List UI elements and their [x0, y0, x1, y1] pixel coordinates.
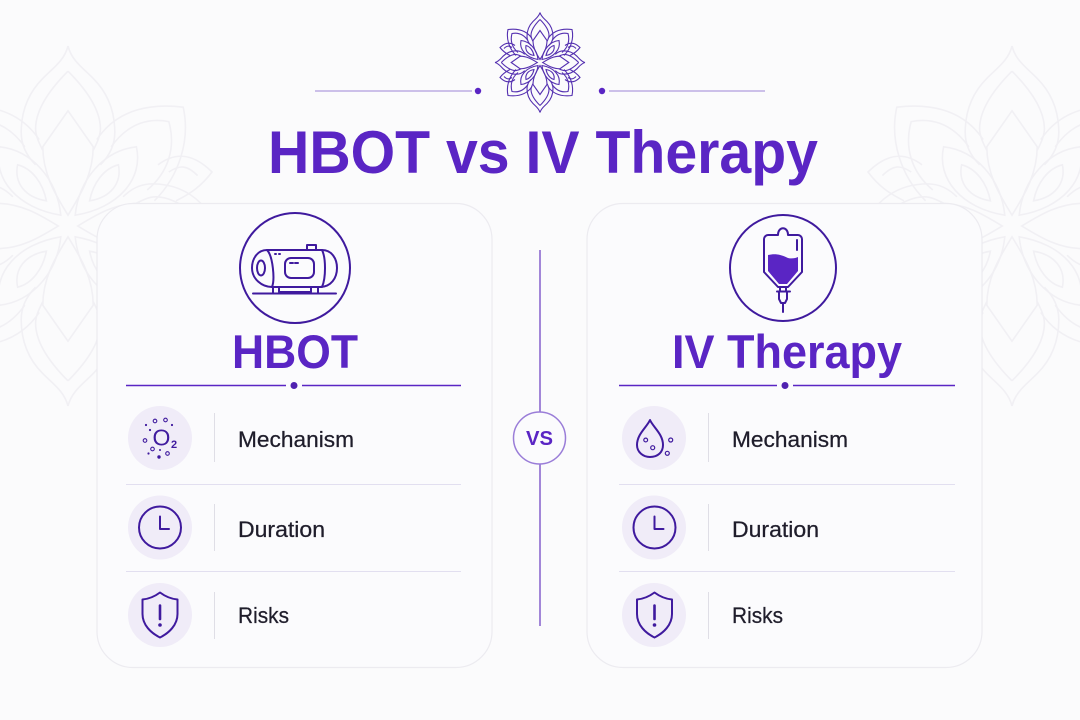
heading divider — [126, 382, 461, 389]
label: Risks — [732, 603, 783, 628]
row: mechanism — [622, 406, 848, 470]
heading: IV Therapy: IV Therapy — [672, 325, 902, 378]
icon: droplet — [622, 406, 686, 470]
row: duration — [622, 496, 819, 560]
icon: oxygen: O — [152, 424, 170, 450]
panel: IV Therapy — [587, 204, 982, 668]
row: risks — [622, 583, 783, 647]
label: Mechanism — [238, 427, 354, 452]
header ornament line right — [599, 88, 765, 94]
panel: HBOT — [97, 204, 492, 668]
icon: clock — [622, 496, 686, 560]
icon: hyperbaric chamber — [240, 213, 350, 323]
header ornament line left — [315, 88, 481, 94]
decorative mandala right — [850, 46, 1080, 406]
heading divider — [619, 382, 955, 389]
label: Risks — [238, 603, 289, 628]
label: Mechanism — [732, 427, 848, 452]
icon: oxygen — [128, 406, 192, 470]
row: duration — [128, 496, 325, 560]
label: Duration — [732, 517, 819, 542]
center divider with VS badge: VS — [526, 428, 553, 450]
icon: clock — [128, 496, 192, 560]
icon: oxygen: 2 — [171, 439, 177, 451]
row: mechanism — [128, 406, 354, 470]
decorative mandala left — [0, 46, 230, 406]
title: HBOT vs IV Therapy — [268, 119, 819, 186]
icon: shield — [128, 583, 192, 647]
label: Duration — [238, 517, 325, 542]
top mandala ornament — [495, 12, 585, 112]
center divider with VS badge — [514, 250, 566, 626]
icon: IV bag — [730, 215, 836, 321]
heading: HBOT: HBOT — [232, 325, 358, 378]
row: risks — [128, 583, 289, 647]
icon: shield — [622, 583, 686, 647]
